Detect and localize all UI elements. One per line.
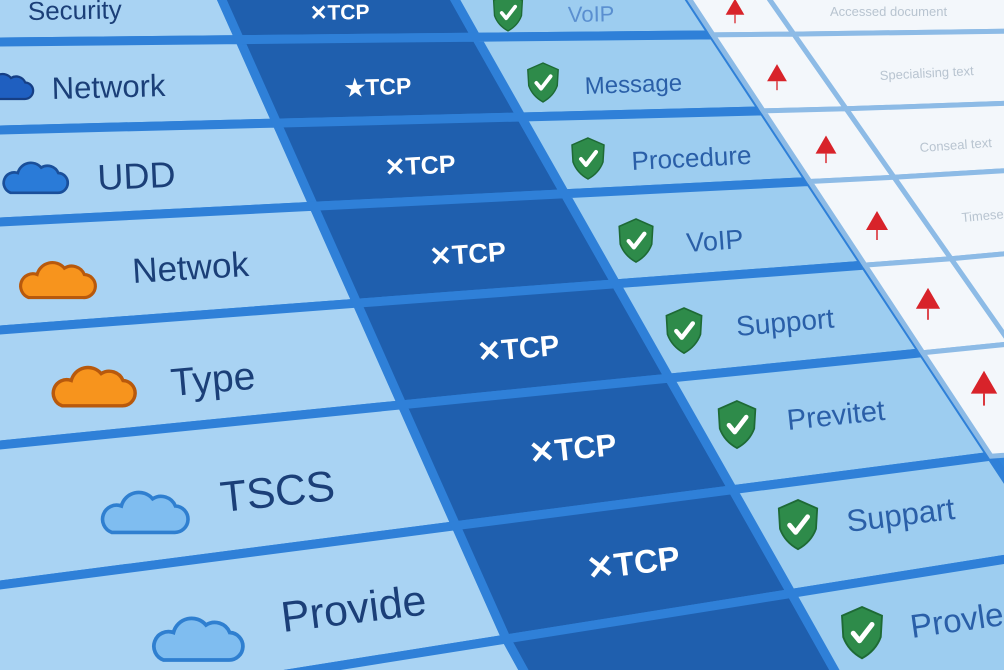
column: warnings <box>677 0 1004 456</box>
shield column labels: Procedure <box>631 140 752 176</box>
TCP labels: ✕TCP <box>428 237 507 272</box>
column: shields <box>444 0 1004 670</box>
shield column labels: Provle <box>908 595 1004 645</box>
row labels <box>28 0 429 642</box>
shield column labels: VoIP <box>685 224 744 258</box>
shield column labels: Message <box>584 70 683 100</box>
shield column labels: Suppart <box>845 491 957 539</box>
row labels: UDD <box>97 154 176 198</box>
shield column labels: Support <box>735 303 835 342</box>
column: labels <box>0 0 540 670</box>
TCP labels: ✕TCP <box>476 330 561 369</box>
TCP labels: ✕TCP <box>384 150 456 182</box>
TCP labels: ✕TCP <box>310 1 370 25</box>
shield column labels: VoIP <box>568 1 615 27</box>
column: TCP dark <box>213 0 840 670</box>
row labels: Network <box>51 68 166 106</box>
row labels: Netwok <box>131 245 250 291</box>
TCP labels: ✕TCP <box>584 539 682 587</box>
faint right column text: Accessed document <box>830 4 947 19</box>
faint right column text: Specialising text <box>879 63 974 83</box>
faint right column text <box>830 4 1004 225</box>
row labels: Type <box>169 355 257 405</box>
shield column labels: Previtet <box>785 395 887 437</box>
row labels: TSCS <box>218 462 337 522</box>
clouds <box>0 74 243 660</box>
TCP labels <box>310 1 682 587</box>
faint right column text: Conseal text <box>919 135 993 155</box>
shields <box>494 0 882 658</box>
TCP labels: ✕TCP <box>527 427 618 471</box>
shield column labels <box>568 1 1004 645</box>
warning triangles <box>726 0 997 406</box>
row labels: Provide <box>278 577 429 642</box>
TCP labels: ★TCP <box>344 73 412 101</box>
